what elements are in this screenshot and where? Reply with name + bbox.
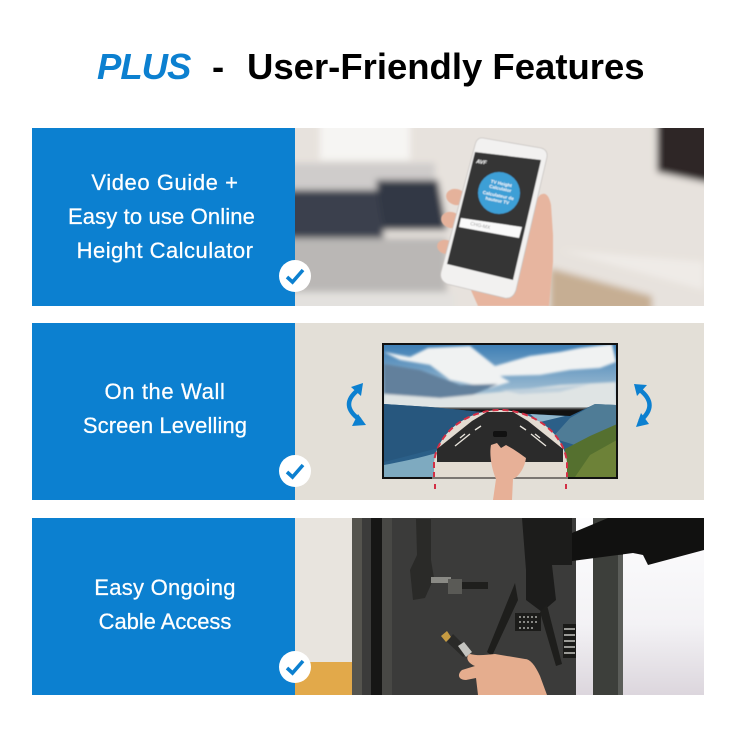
window frame bbox=[593, 518, 623, 695]
TV bottom edge bbox=[432, 477, 568, 479]
photo: hand holding phone: CHG-MX bbox=[470, 221, 491, 231]
panel: on the wall screen levelling bbox=[32, 323, 704, 500]
title: User-Friendly Features bbox=[247, 46, 645, 87]
TV screen bbox=[382, 343, 618, 479]
bracket cutout arch bbox=[434, 410, 567, 478]
fingers and palm bbox=[470, 194, 553, 306]
photo: hand holding phone: Calculator bbox=[489, 184, 512, 193]
logo: AVF bbox=[475, 159, 488, 167]
panel: easy ongoing cable access bbox=[32, 518, 704, 695]
hand bbox=[459, 654, 547, 695]
text: cable access: Cable Access bbox=[99, 609, 231, 634]
text: video guide bbox=[32, 128, 295, 306]
text: video guide: Video Guide + bbox=[91, 170, 239, 195]
photo: hand holding phone bbox=[295, 128, 704, 306]
TV back bbox=[352, 518, 576, 695]
text: screen levelling: On the Wall bbox=[104, 379, 226, 404]
calculator badge bbox=[478, 172, 520, 214]
text: video guide: Height Calculator bbox=[77, 238, 253, 263]
cable plug bbox=[441, 631, 472, 657]
search bar bbox=[459, 218, 522, 238]
wall and sofa bbox=[295, 518, 355, 695]
panel: video guide and height calculator bbox=[32, 128, 704, 306]
photo: hand holding phone: TV Height bbox=[490, 179, 513, 188]
text: screen levelling bbox=[32, 323, 295, 500]
red ticks bbox=[434, 484, 436, 489]
bracket plate bbox=[437, 412, 563, 462]
mount arm bbox=[487, 518, 704, 666]
hand bbox=[490, 443, 526, 500]
phone body bbox=[441, 138, 547, 298]
text: cable access bbox=[32, 518, 295, 695]
title: - bbox=[212, 46, 224, 87]
photo: cable behind TV bbox=[295, 518, 704, 695]
text: cable access: Easy Ongoing bbox=[94, 575, 236, 600]
cable clip bbox=[410, 519, 488, 600]
icon: check badge bbox=[279, 651, 311, 683]
icon: check badge bbox=[279, 455, 311, 487]
left rotate arrow bbox=[349, 383, 366, 426]
phone screen bbox=[447, 152, 541, 280]
icon: check badge bbox=[279, 260, 311, 292]
title: PLUS bbox=[97, 46, 190, 87]
window bbox=[575, 518, 704, 695]
text: screen levelling: Screen Levelling bbox=[83, 413, 247, 438]
text: video guide: Easy to use Online bbox=[68, 204, 255, 229]
illustration: TV with levelling bracket bbox=[295, 323, 704, 500]
right rotate arrow bbox=[634, 384, 650, 427]
photo: hand holding phone: Calculateur de bbox=[482, 190, 515, 201]
photo: hand holding phone: hauteur TV bbox=[485, 196, 510, 206]
